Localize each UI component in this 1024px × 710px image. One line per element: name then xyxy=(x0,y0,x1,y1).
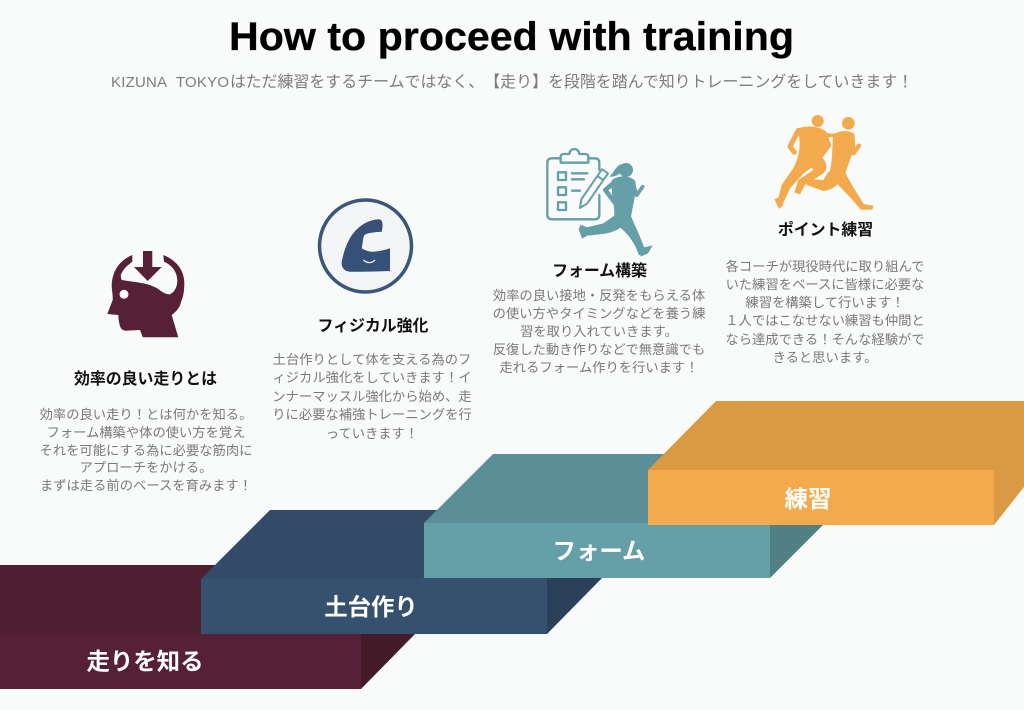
step 2: 土台作り: 土台作り xyxy=(324,594,418,620)
subtitle: はただ練習をするチームではなく、【走り】を段階を踏んで知りトレーニングをしていきます！ xyxy=(230,73,913,91)
step 3: フォーム xyxy=(424,454,823,578)
step 4: 練習: 練習 xyxy=(785,486,831,512)
body text: ィジカル強化をしていきます！イ xyxy=(272,370,472,385)
body text: 各コーチが現役時代に取り組んで xyxy=(726,259,924,274)
body text: っていきます！ xyxy=(326,426,418,441)
body text: なら達成できる！そんな経験がで xyxy=(725,332,925,347)
body text: フォーム構築や体の使い方を覚え xyxy=(46,424,246,440)
body text: 土台作りとして体を支える為のフ xyxy=(273,352,471,367)
step 4: 練習 xyxy=(648,401,1024,525)
body text: 効率の良い接地・反発をもらえる体 xyxy=(493,288,705,303)
body text: アプローチをかける。 xyxy=(80,460,212,475)
body text: ンナーマッスル強化から始め、走 xyxy=(272,389,472,404)
heading: ポイント練習 xyxy=(778,220,873,239)
body text: りに必要な補強トレーニングを行 xyxy=(272,407,472,422)
body text: １人ではこなせない練習も仲間と xyxy=(725,313,925,328)
icon: flexed arm in circle xyxy=(320,200,412,292)
panel: ポイント練習 xyxy=(725,220,925,365)
step 1: 走りを知る xyxy=(0,565,416,689)
body text: 反復した動き作りなどで無意識でも xyxy=(493,341,705,357)
panel: フィジカル強化 xyxy=(272,317,472,441)
body text xyxy=(493,288,706,375)
body text: それを可能にする為に必要な筋肉に xyxy=(40,442,252,458)
body text: の使い方やタイミングなどを養う練 xyxy=(493,305,706,321)
step 2: 土台作り xyxy=(201,510,602,634)
title: How to proceed with training xyxy=(229,15,794,59)
subtitle: KIZUNA TOKYO xyxy=(111,74,229,91)
body text: 効率の良い走り！とは何かを知る。 xyxy=(40,406,252,422)
body text: 練習を構築して行います！ xyxy=(745,295,905,310)
heading: フィジカル強化 xyxy=(318,317,429,335)
body text xyxy=(40,406,252,493)
body text: まずは走る前のベースを育みます！ xyxy=(40,477,252,493)
heading: フォーム構築 xyxy=(552,261,647,280)
panel: フォーム構築 xyxy=(493,261,706,375)
icon: head with down arrow xyxy=(107,251,184,337)
body text: きると思います。 xyxy=(773,350,877,365)
step 1: 走りを知る: 走りを知る xyxy=(87,648,203,674)
icon: two runners xyxy=(774,115,874,210)
body text xyxy=(272,352,472,441)
body text: 習を取り入れていきます。 xyxy=(520,324,678,339)
panel: 効率の良い走りとは xyxy=(40,369,252,493)
body text: 走れるフォーム作りを行います！ xyxy=(499,360,699,375)
body text xyxy=(725,259,925,365)
step 3: フォーム: フォーム xyxy=(553,538,645,564)
icon: checklist and runner xyxy=(547,149,653,257)
heading: 効率の良い走りとは xyxy=(74,369,217,388)
body text: いた練習をベースに皆様に必要な xyxy=(726,277,924,292)
